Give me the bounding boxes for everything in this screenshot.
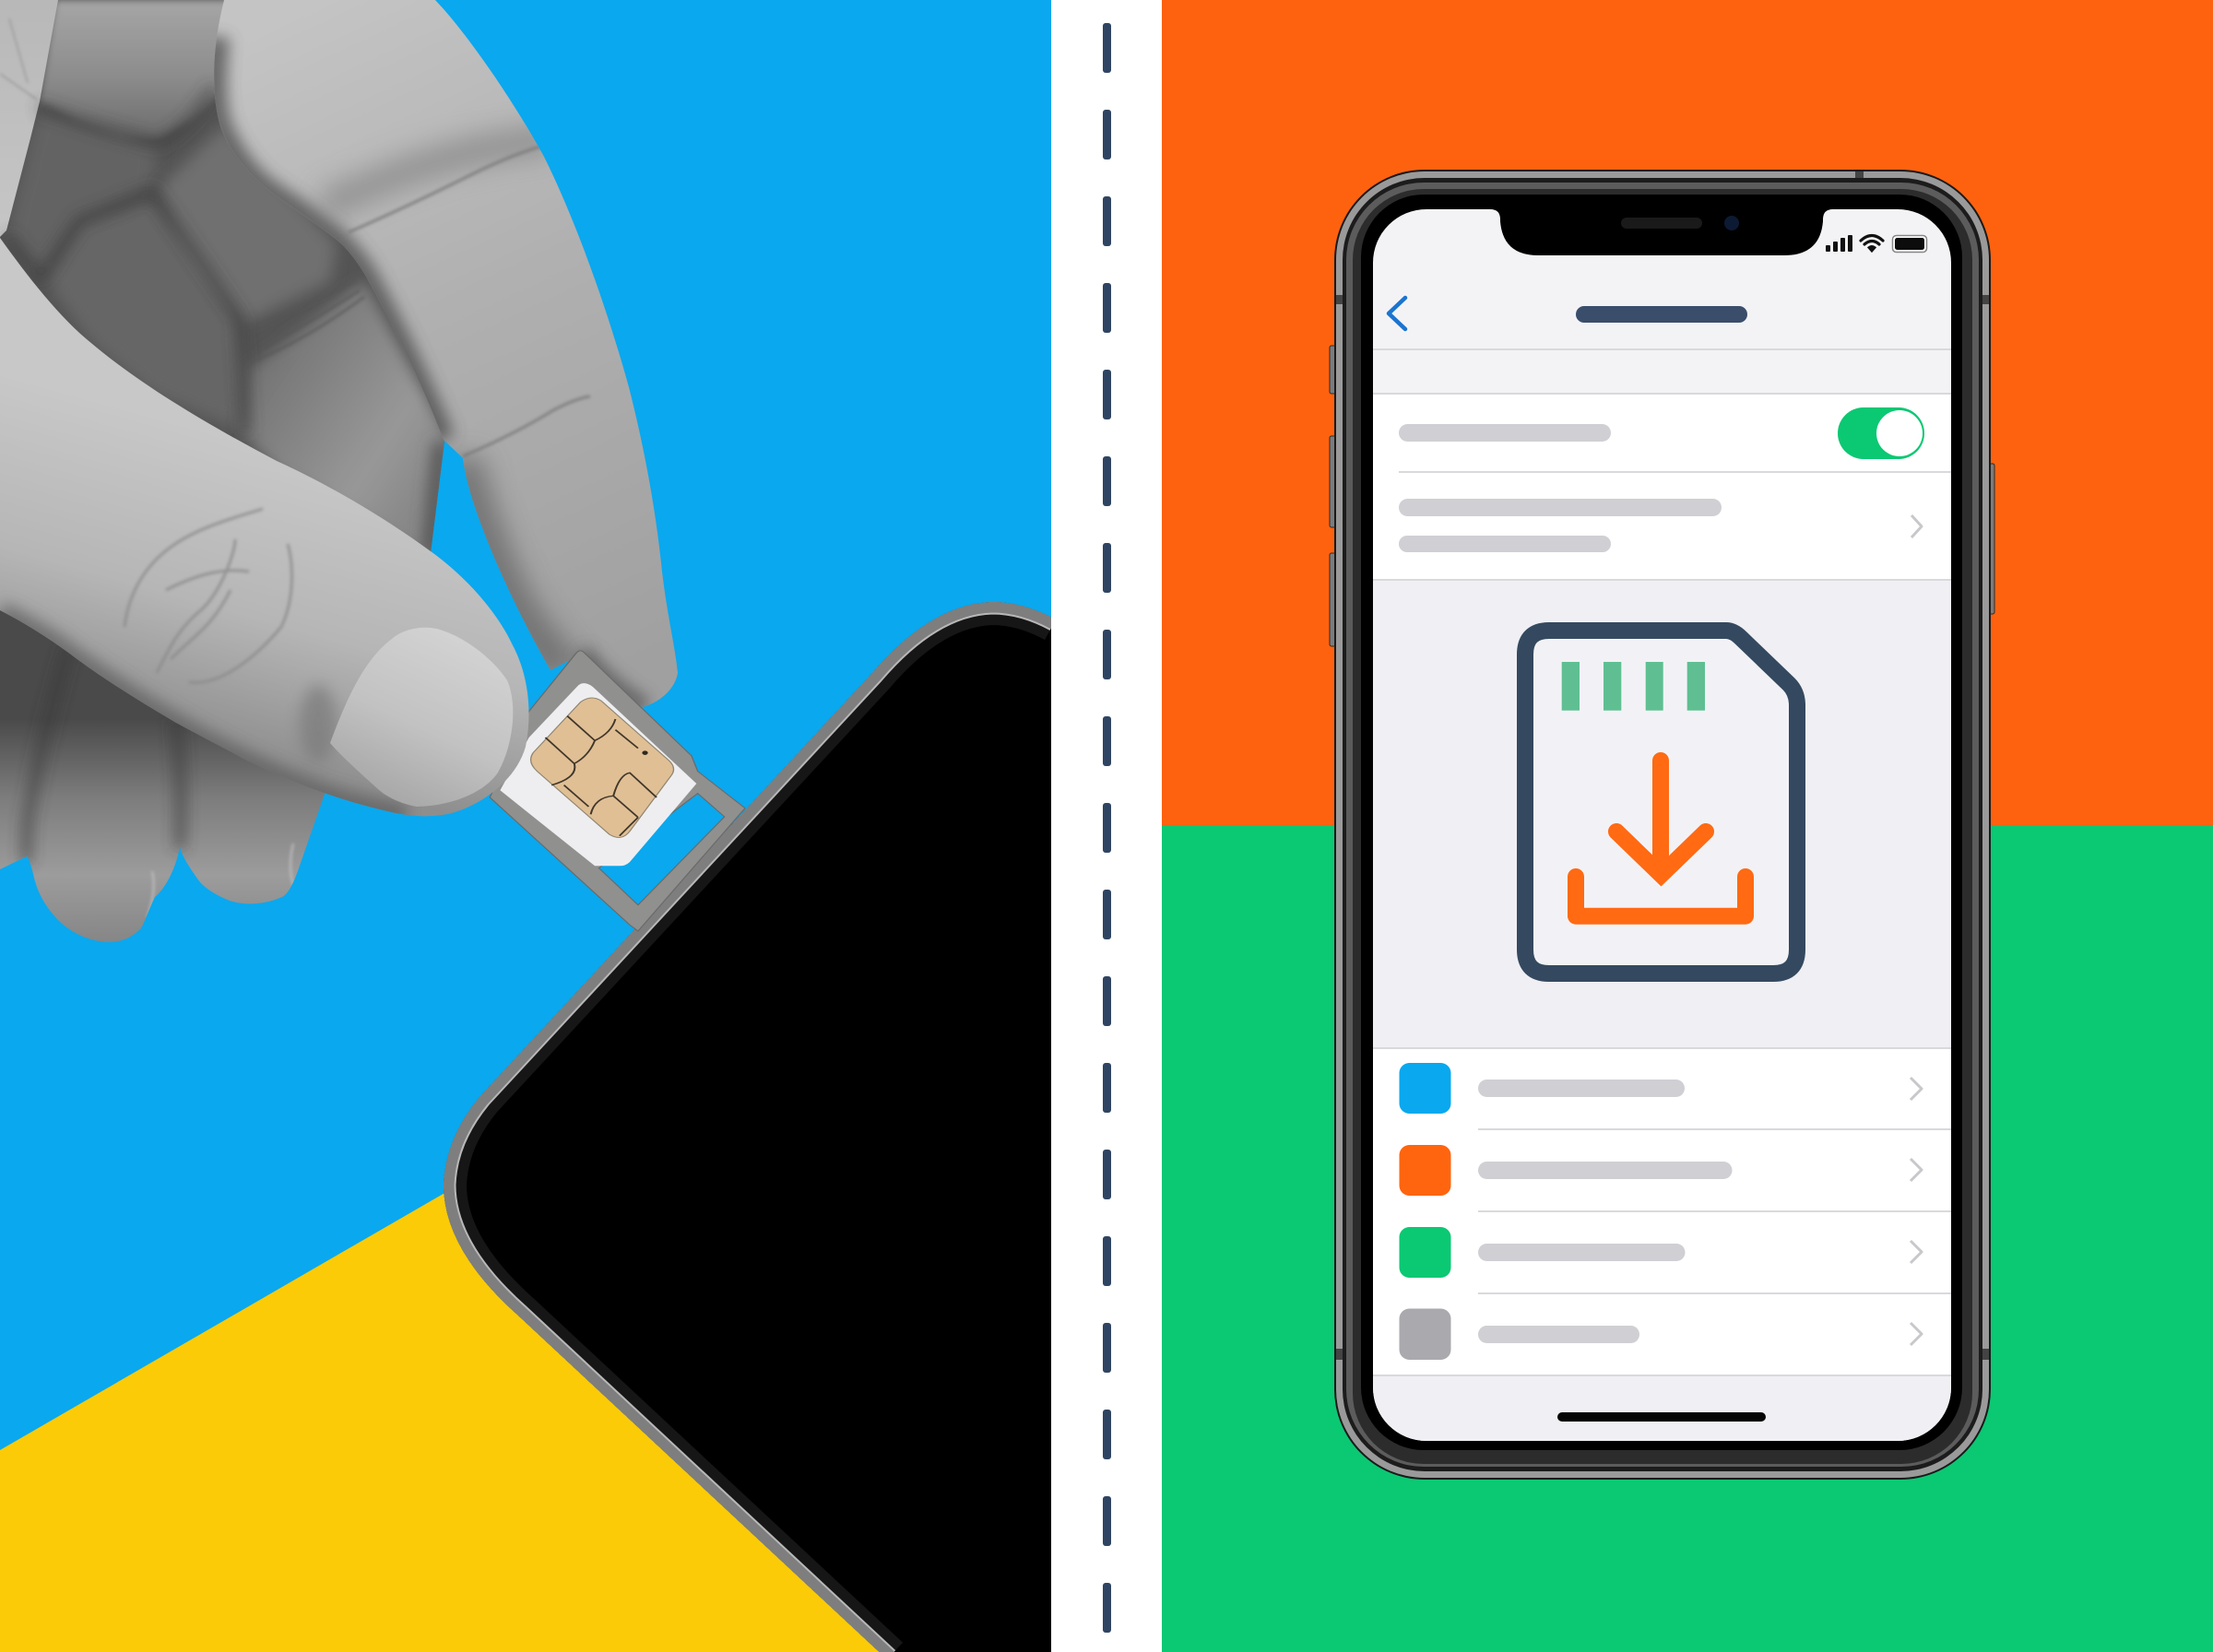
middle finger lit segment <box>242 281 452 562</box>
knuckle shadow creases <box>7 88 246 433</box>
middle SIM area <box>1373 580 1951 1048</box>
setting row two labels <box>1399 499 1722 552</box>
panel: right background green <box>1162 825 2213 1652</box>
phone body bands <box>1334 170 1991 1480</box>
status: wifi <box>1861 236 1883 252</box>
home indicator <box>1557 1412 1766 1422</box>
shadow left of nail <box>300 685 337 762</box>
list group band <box>1373 1048 1951 1375</box>
chip marker dot <box>642 750 648 755</box>
list row 2 <box>1400 1145 1922 1196</box>
green contacts <box>1562 662 1705 711</box>
panel: left physical SIM background <box>0 0 1051 1652</box>
download arrow <box>1616 761 1706 875</box>
eSIM download icon <box>1525 631 1797 974</box>
shadow along lower left edge <box>461 458 567 673</box>
ring finger <box>159 124 337 323</box>
settings group band <box>1373 394 1951 580</box>
hand: thumb in front of the tray <box>0 230 539 825</box>
antenna bands <box>1336 171 1989 1360</box>
cavity finger <box>11 116 155 264</box>
dashed divider line <box>1103 23 1111 1633</box>
row chevron <box>1911 515 1922 537</box>
nail edge highlights <box>148 844 293 917</box>
shade at wedge <box>429 442 441 553</box>
joint creases <box>349 143 590 456</box>
list row 1 <box>1400 1063 1922 1114</box>
status: signal bars <box>1826 235 1852 252</box>
back finger top <box>40 0 231 138</box>
strip palm creases <box>0 18 37 100</box>
gold contact chip <box>531 698 674 837</box>
panel: right background orange <box>1162 0 2213 825</box>
panel: white divider <box>1051 0 1162 1652</box>
status: battery <box>1892 236 1927 253</box>
setting row label <box>1399 424 1611 442</box>
toggle switch <box>1838 407 1924 459</box>
nav and section separators <box>1373 348 1951 1376</box>
hand: lower fingers <box>0 610 325 942</box>
phone held at an angle <box>433 590 1060 1652</box>
list row 3 <box>1400 1227 1922 1278</box>
thumb nail <box>330 628 513 807</box>
SIM tray <box>490 651 745 931</box>
lower curled finger <box>44 201 246 431</box>
hand: palm and curled fingers <box>0 0 461 572</box>
screen <box>1373 209 1951 1441</box>
gaps between lower fingers <box>14 723 194 866</box>
hand: index finger <box>203 0 692 719</box>
upright phone <box>1330 170 1994 1480</box>
knuckle wrinkles <box>124 509 291 682</box>
SIM outline <box>1525 631 1797 974</box>
knuckle shadow band <box>323 138 553 207</box>
nav title pill <box>1576 306 1747 323</box>
bottom area <box>1373 1388 1951 1441</box>
joint lines middle finger <box>277 291 364 352</box>
tray frame <box>490 651 745 931</box>
chip contact lines <box>546 716 657 836</box>
yellow wedge <box>0 1193 879 1652</box>
white SIM card <box>500 683 696 866</box>
palm shadow base <box>0 0 461 572</box>
fold shadow along inner edge <box>215 37 444 440</box>
fingertip shade <box>581 653 645 708</box>
far left palm strip <box>0 0 58 237</box>
thumb lower edge shading <box>0 613 406 815</box>
earpiece speaker <box>1621 218 1702 229</box>
front camera <box>1724 216 1739 230</box>
back chevron <box>1389 298 1405 329</box>
list row 4 <box>1400 1309 1922 1360</box>
side buttons <box>1330 346 1994 646</box>
download tray <box>1576 877 1746 916</box>
